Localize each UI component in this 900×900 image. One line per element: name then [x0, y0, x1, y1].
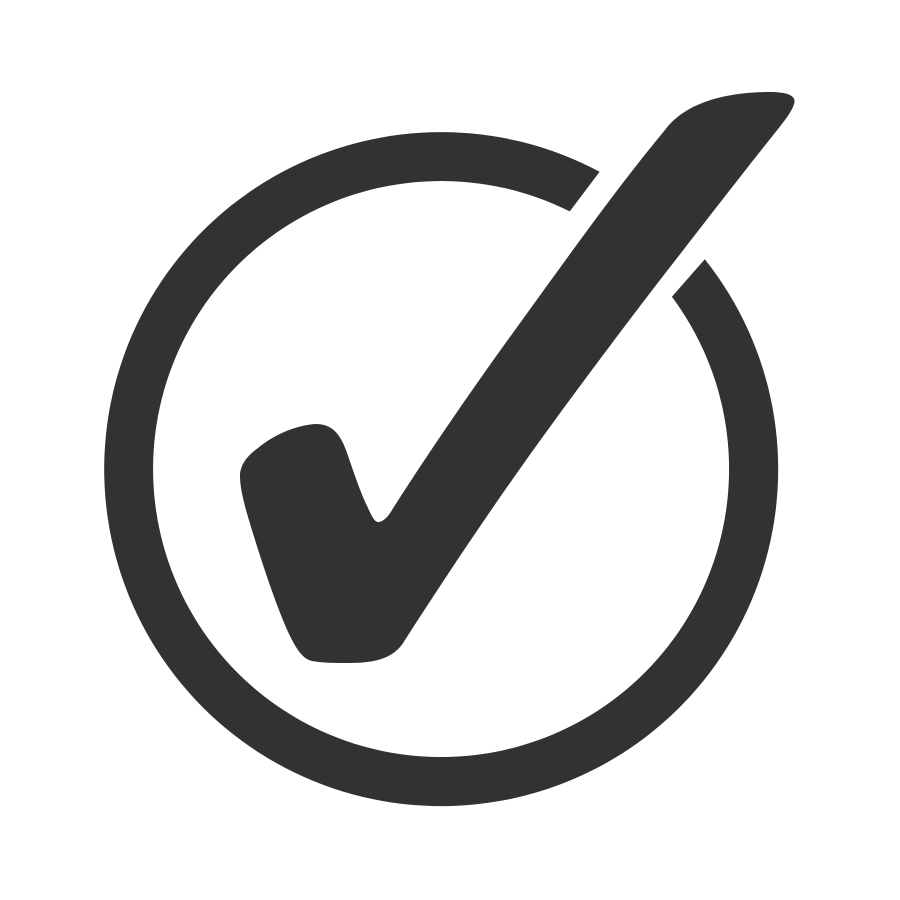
icon: check mark	[240, 92, 795, 663]
icon: circle ring with gap	[104, 132, 778, 806]
